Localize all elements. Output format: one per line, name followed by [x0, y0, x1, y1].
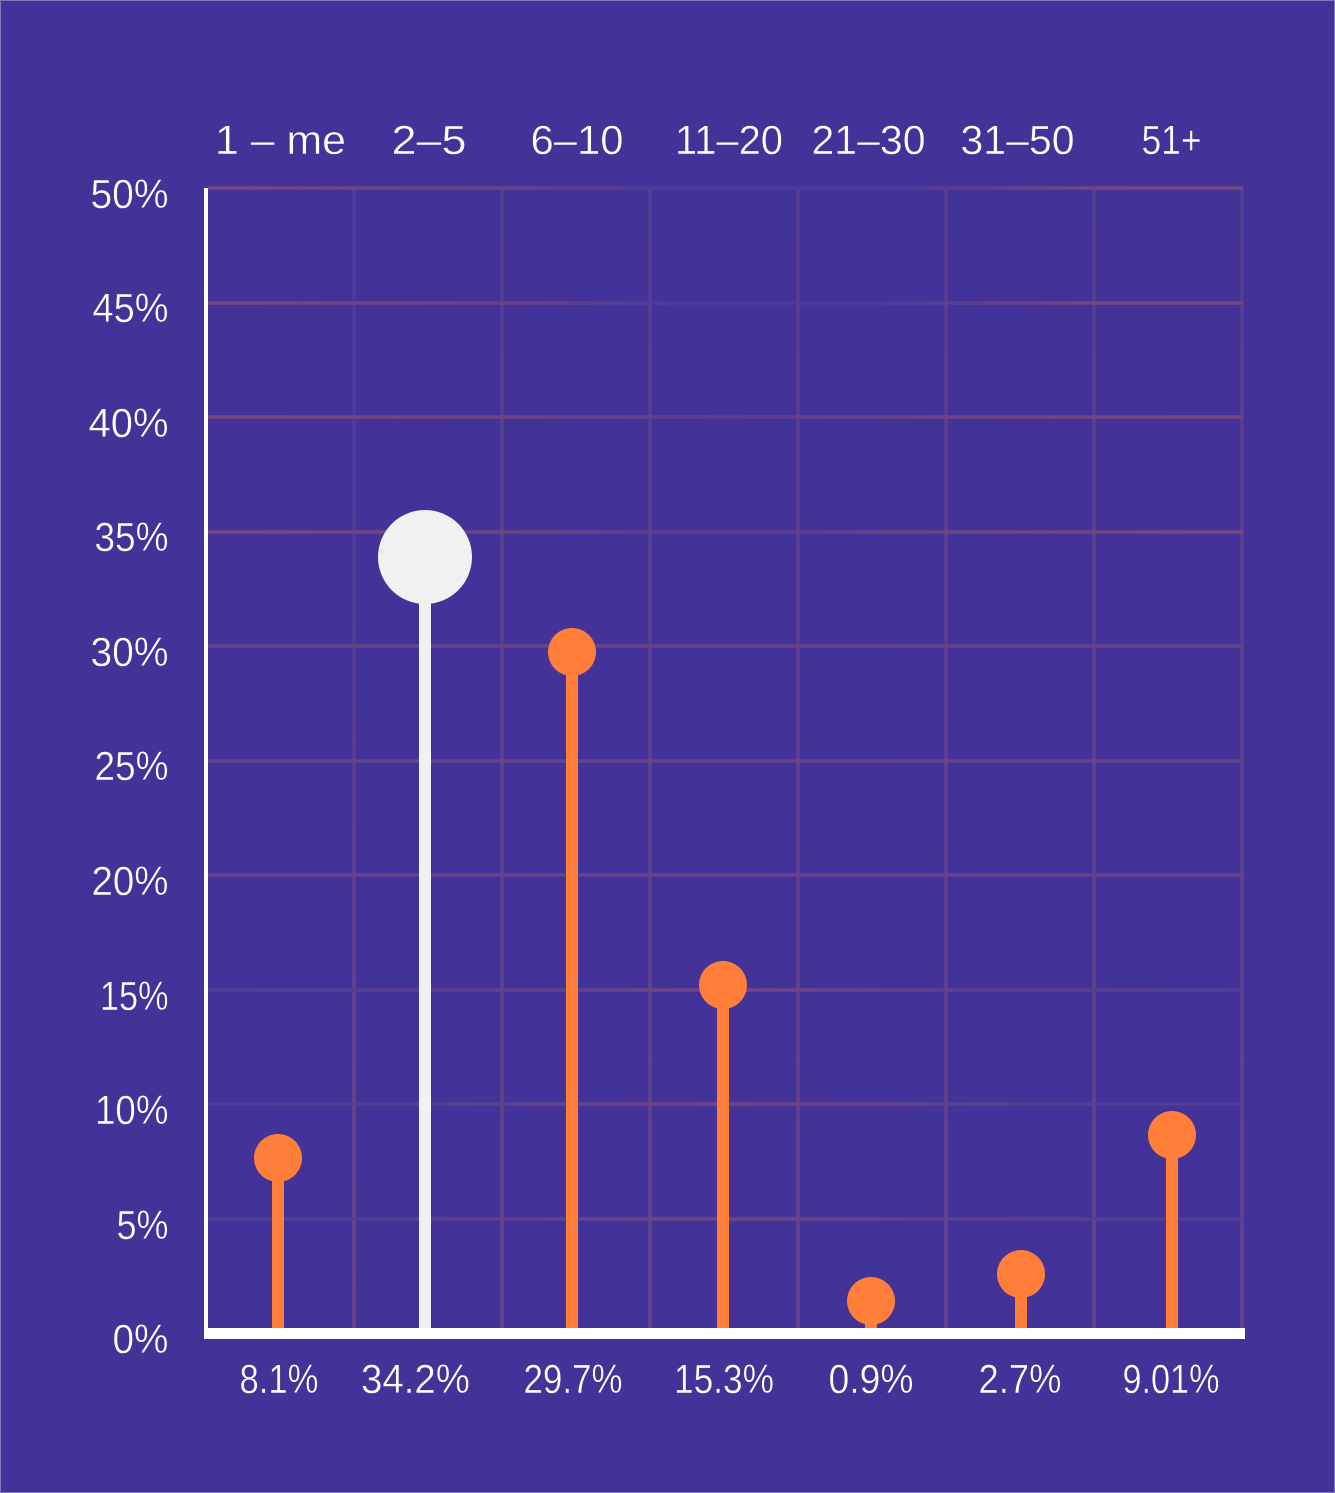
x axis — [204, 1328, 1245, 1339]
category labels: 11–20 — [675, 117, 783, 163]
category labels: 2–5 — [392, 117, 466, 163]
y axis labels: 20% — [92, 858, 168, 904]
category labels: 1 – me — [215, 117, 346, 163]
lollipop: 21–30 0.9% — [847, 1277, 895, 1328]
lollipop: 2–5 34.2% highlighted — [378, 510, 472, 1328]
y axis labels: 25% — [94, 743, 168, 789]
y axis labels: 45% — [92, 285, 168, 331]
y axis labels: 0% — [112, 1316, 168, 1362]
value labels: 9.01% — [1122, 1356, 1220, 1402]
lollipop: 51+ 9.01% — [1148, 1111, 1196, 1328]
y axis labels: 40% — [88, 400, 168, 446]
y axis labels: 10% — [95, 1087, 168, 1133]
category labels: 6–10 — [530, 117, 624, 163]
category labels: 31–50 — [960, 117, 1074, 163]
lollipop: 11–20 15.3% — [699, 961, 747, 1328]
category labels: 21–30 — [812, 117, 926, 163]
category labels: 51+ — [1142, 117, 1202, 163]
value labels: 29.7% — [524, 1356, 622, 1402]
value labels: 34.2% — [361, 1356, 470, 1402]
y axis labels — [88, 171, 168, 1362]
chart gridlines — [208, 188, 1243, 1330]
value labels — [240, 1356, 1220, 1402]
y axis labels: 30% — [90, 629, 168, 675]
y axis labels: 35% — [94, 514, 168, 560]
category labels — [215, 117, 1202, 163]
lollipop: 6–10 29.7% — [548, 628, 596, 1328]
value labels: 8.1% — [240, 1356, 318, 1402]
value labels: 0.9% — [828, 1356, 914, 1402]
y axis labels: 15% — [100, 973, 168, 1019]
value labels: 2.7% — [978, 1356, 1062, 1402]
y axis labels: 5% — [116, 1202, 168, 1248]
y axis labels: 50% — [90, 171, 168, 217]
lollipop: 31–50 2.7% — [997, 1250, 1045, 1328]
lollipop: 1 – me 8.1% — [254, 1134, 302, 1328]
value labels: 15.3% — [674, 1356, 774, 1402]
y axis — [204, 188, 208, 1338]
